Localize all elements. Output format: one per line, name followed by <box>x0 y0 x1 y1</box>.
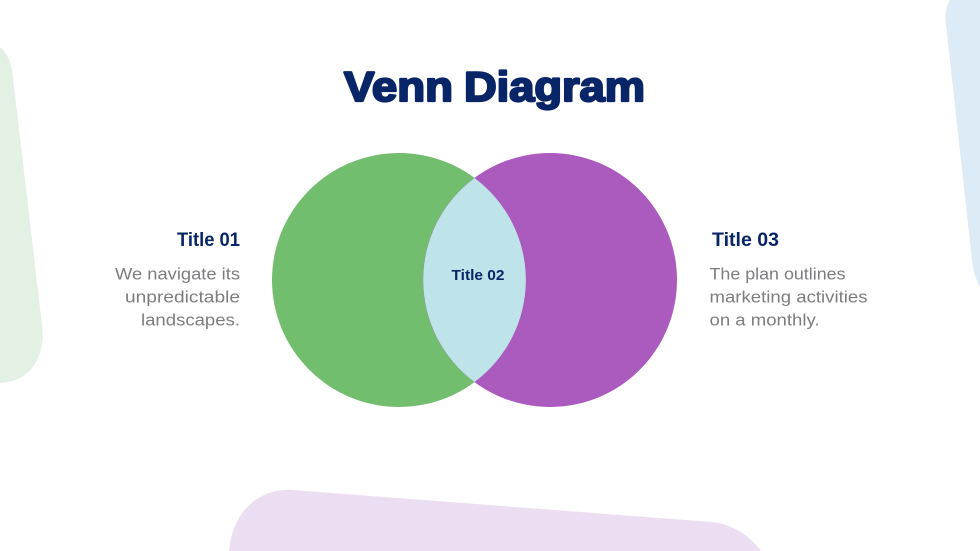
background shape: purple <box>229 490 761 551</box>
title: Venn <box>344 63 453 110</box>
background shape: green <box>0 47 43 383</box>
body text: right: on a monthly. <box>710 310 820 330</box>
body text: left: landscapes. <box>141 310 240 330</box>
circle: left green <box>272 153 526 407</box>
title: Diagram <box>464 63 645 110</box>
label: Title 02: Title 02 <box>452 268 504 284</box>
circle: right purple <box>423 153 677 407</box>
heading: Title 01: Title 01 <box>177 230 240 251</box>
right text block <box>710 230 868 330</box>
body text: left: unpredictable <box>125 288 240 306</box>
venn diagram <box>272 153 677 407</box>
background shape: blue <box>946 0 980 287</box>
intersection lens <box>423 178 526 382</box>
body text: left: We navigate its <box>115 264 240 284</box>
body text: right: The plan outlines <box>710 264 846 284</box>
left text block <box>115 230 240 330</box>
body text: left <box>115 264 240 330</box>
title <box>344 63 645 110</box>
body text: right <box>710 264 868 330</box>
body text: right: marketing activities <box>710 288 868 306</box>
heading: Title 03: Title 03 <box>712 230 779 251</box>
